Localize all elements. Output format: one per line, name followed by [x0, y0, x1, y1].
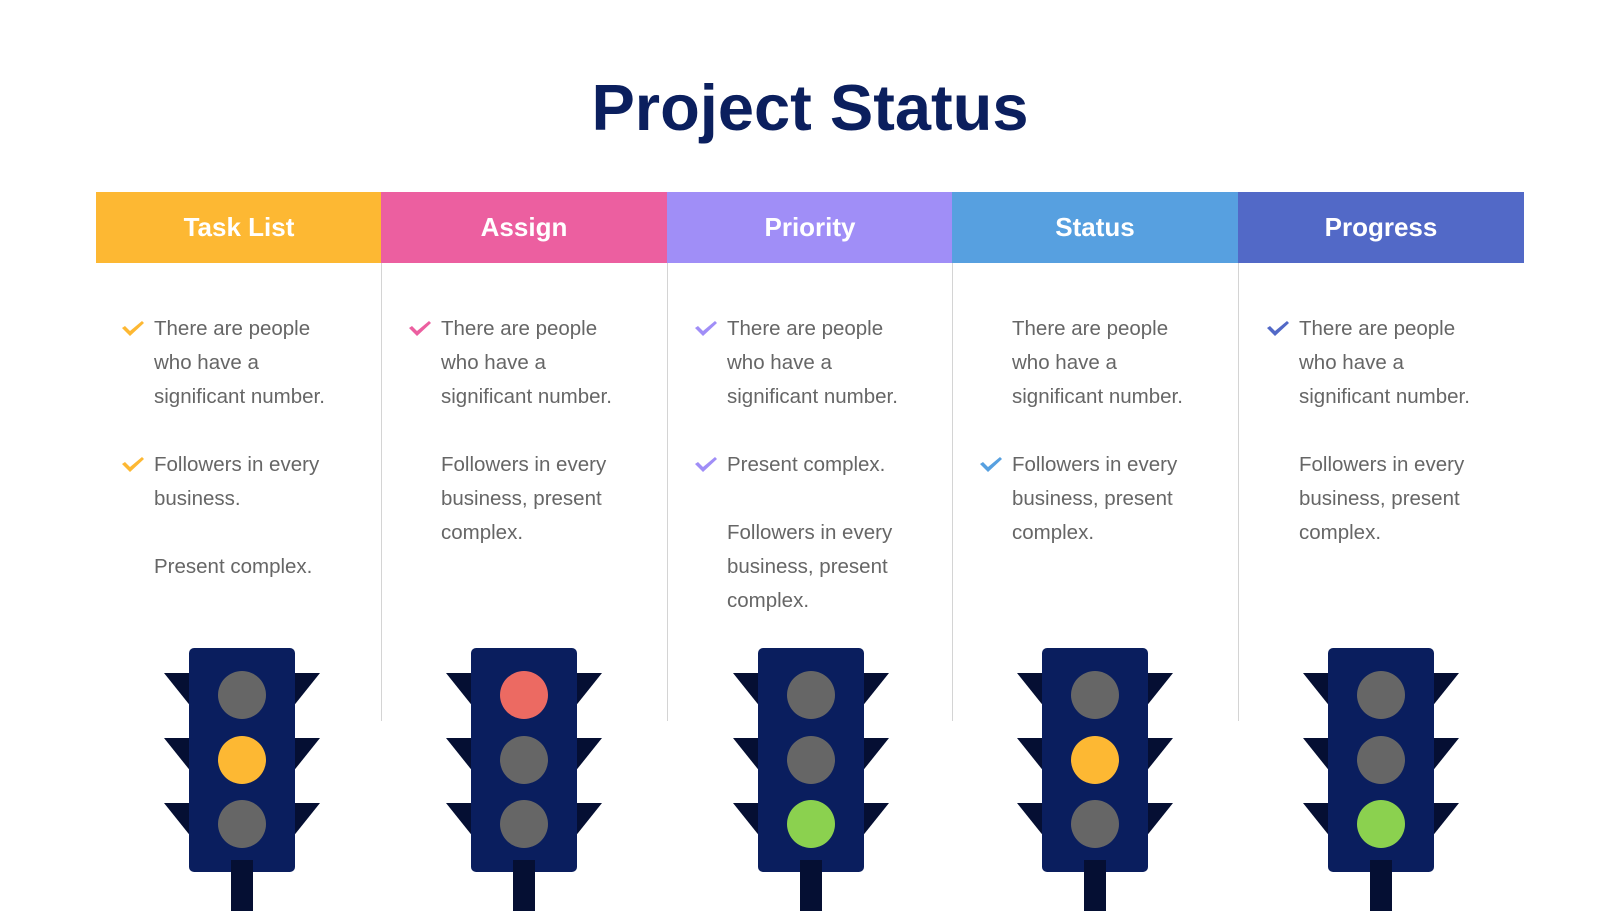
- text column: Priority: There are people: [727, 317, 883, 340]
- text column: Status: who have a: [1012, 351, 1117, 374]
- text column: Assign: who have a: [441, 351, 546, 374]
- header: Status: Status: [1055, 212, 1135, 242]
- text column: Status: significant number.: [1012, 385, 1183, 408]
- header: Priority: [667, 192, 953, 263]
- text column: Status: complex.: [1012, 521, 1094, 544]
- text column: Assign: Followers in every: [441, 453, 606, 476]
- icon: traffic light 4: [1017, 648, 1173, 911]
- header: Status: [952, 192, 1238, 263]
- text column: Assign: business, present: [441, 487, 602, 510]
- text column: Task List: Followers in every: [154, 453, 319, 476]
- header: Progress: [1238, 192, 1524, 263]
- icon: traffic light 3: [733, 648, 889, 911]
- title: Project Status: [591, 71, 1029, 144]
- text column: Progress: Followers in every: [1299, 453, 1464, 476]
- text column: Progress: business, present: [1299, 487, 1460, 510]
- text column: Task List: business.: [154, 487, 241, 510]
- text column: Progress: [1267, 317, 1470, 544]
- text column: Task List: significant number.: [154, 385, 325, 408]
- text column: Status: [980, 317, 1183, 544]
- text column: Priority: significant number.: [727, 385, 898, 408]
- text column: Status: business, present: [1012, 487, 1173, 510]
- text column: Priority: [695, 317, 898, 612]
- text column: Priority: complex.: [727, 589, 809, 612]
- header: Progress: Progress: [1325, 212, 1437, 242]
- text column: Task List: Present complex.: [154, 555, 312, 578]
- text column: Status: There are people: [1012, 317, 1168, 340]
- text column: Assign: [409, 317, 612, 544]
- header: Task List: Task List: [184, 212, 294, 242]
- icon: traffic light 5: [1303, 648, 1459, 911]
- text column: Priority: who have a: [727, 351, 832, 374]
- text column: Assign: significant number.: [441, 385, 612, 408]
- icon: traffic light 1: [164, 648, 320, 911]
- header: Task List: [96, 192, 382, 263]
- text column: Progress: There are people: [1299, 317, 1455, 340]
- text column: Progress: who have a: [1299, 351, 1404, 374]
- header: Assign: Assign: [481, 212, 567, 242]
- text column: Task List: [122, 317, 325, 578]
- header: Assign: [381, 192, 667, 263]
- text column: Priority: business, present: [727, 555, 888, 578]
- text column: Assign: There are people: [441, 317, 597, 340]
- text column: Progress: significant number.: [1299, 385, 1470, 408]
- text column: Task List: There are people: [154, 317, 310, 340]
- text column: Progress: complex.: [1299, 521, 1381, 544]
- icon: traffic light 2: [446, 648, 602, 911]
- text column: Priority: Followers in every: [727, 521, 892, 544]
- header: Priority: Priority: [764, 212, 856, 242]
- text column: Priority: Present complex.: [727, 453, 885, 476]
- text column: Status: Followers in every: [1012, 453, 1177, 476]
- text column: Task List: who have a: [154, 351, 259, 374]
- text column: Assign: complex.: [441, 521, 523, 544]
